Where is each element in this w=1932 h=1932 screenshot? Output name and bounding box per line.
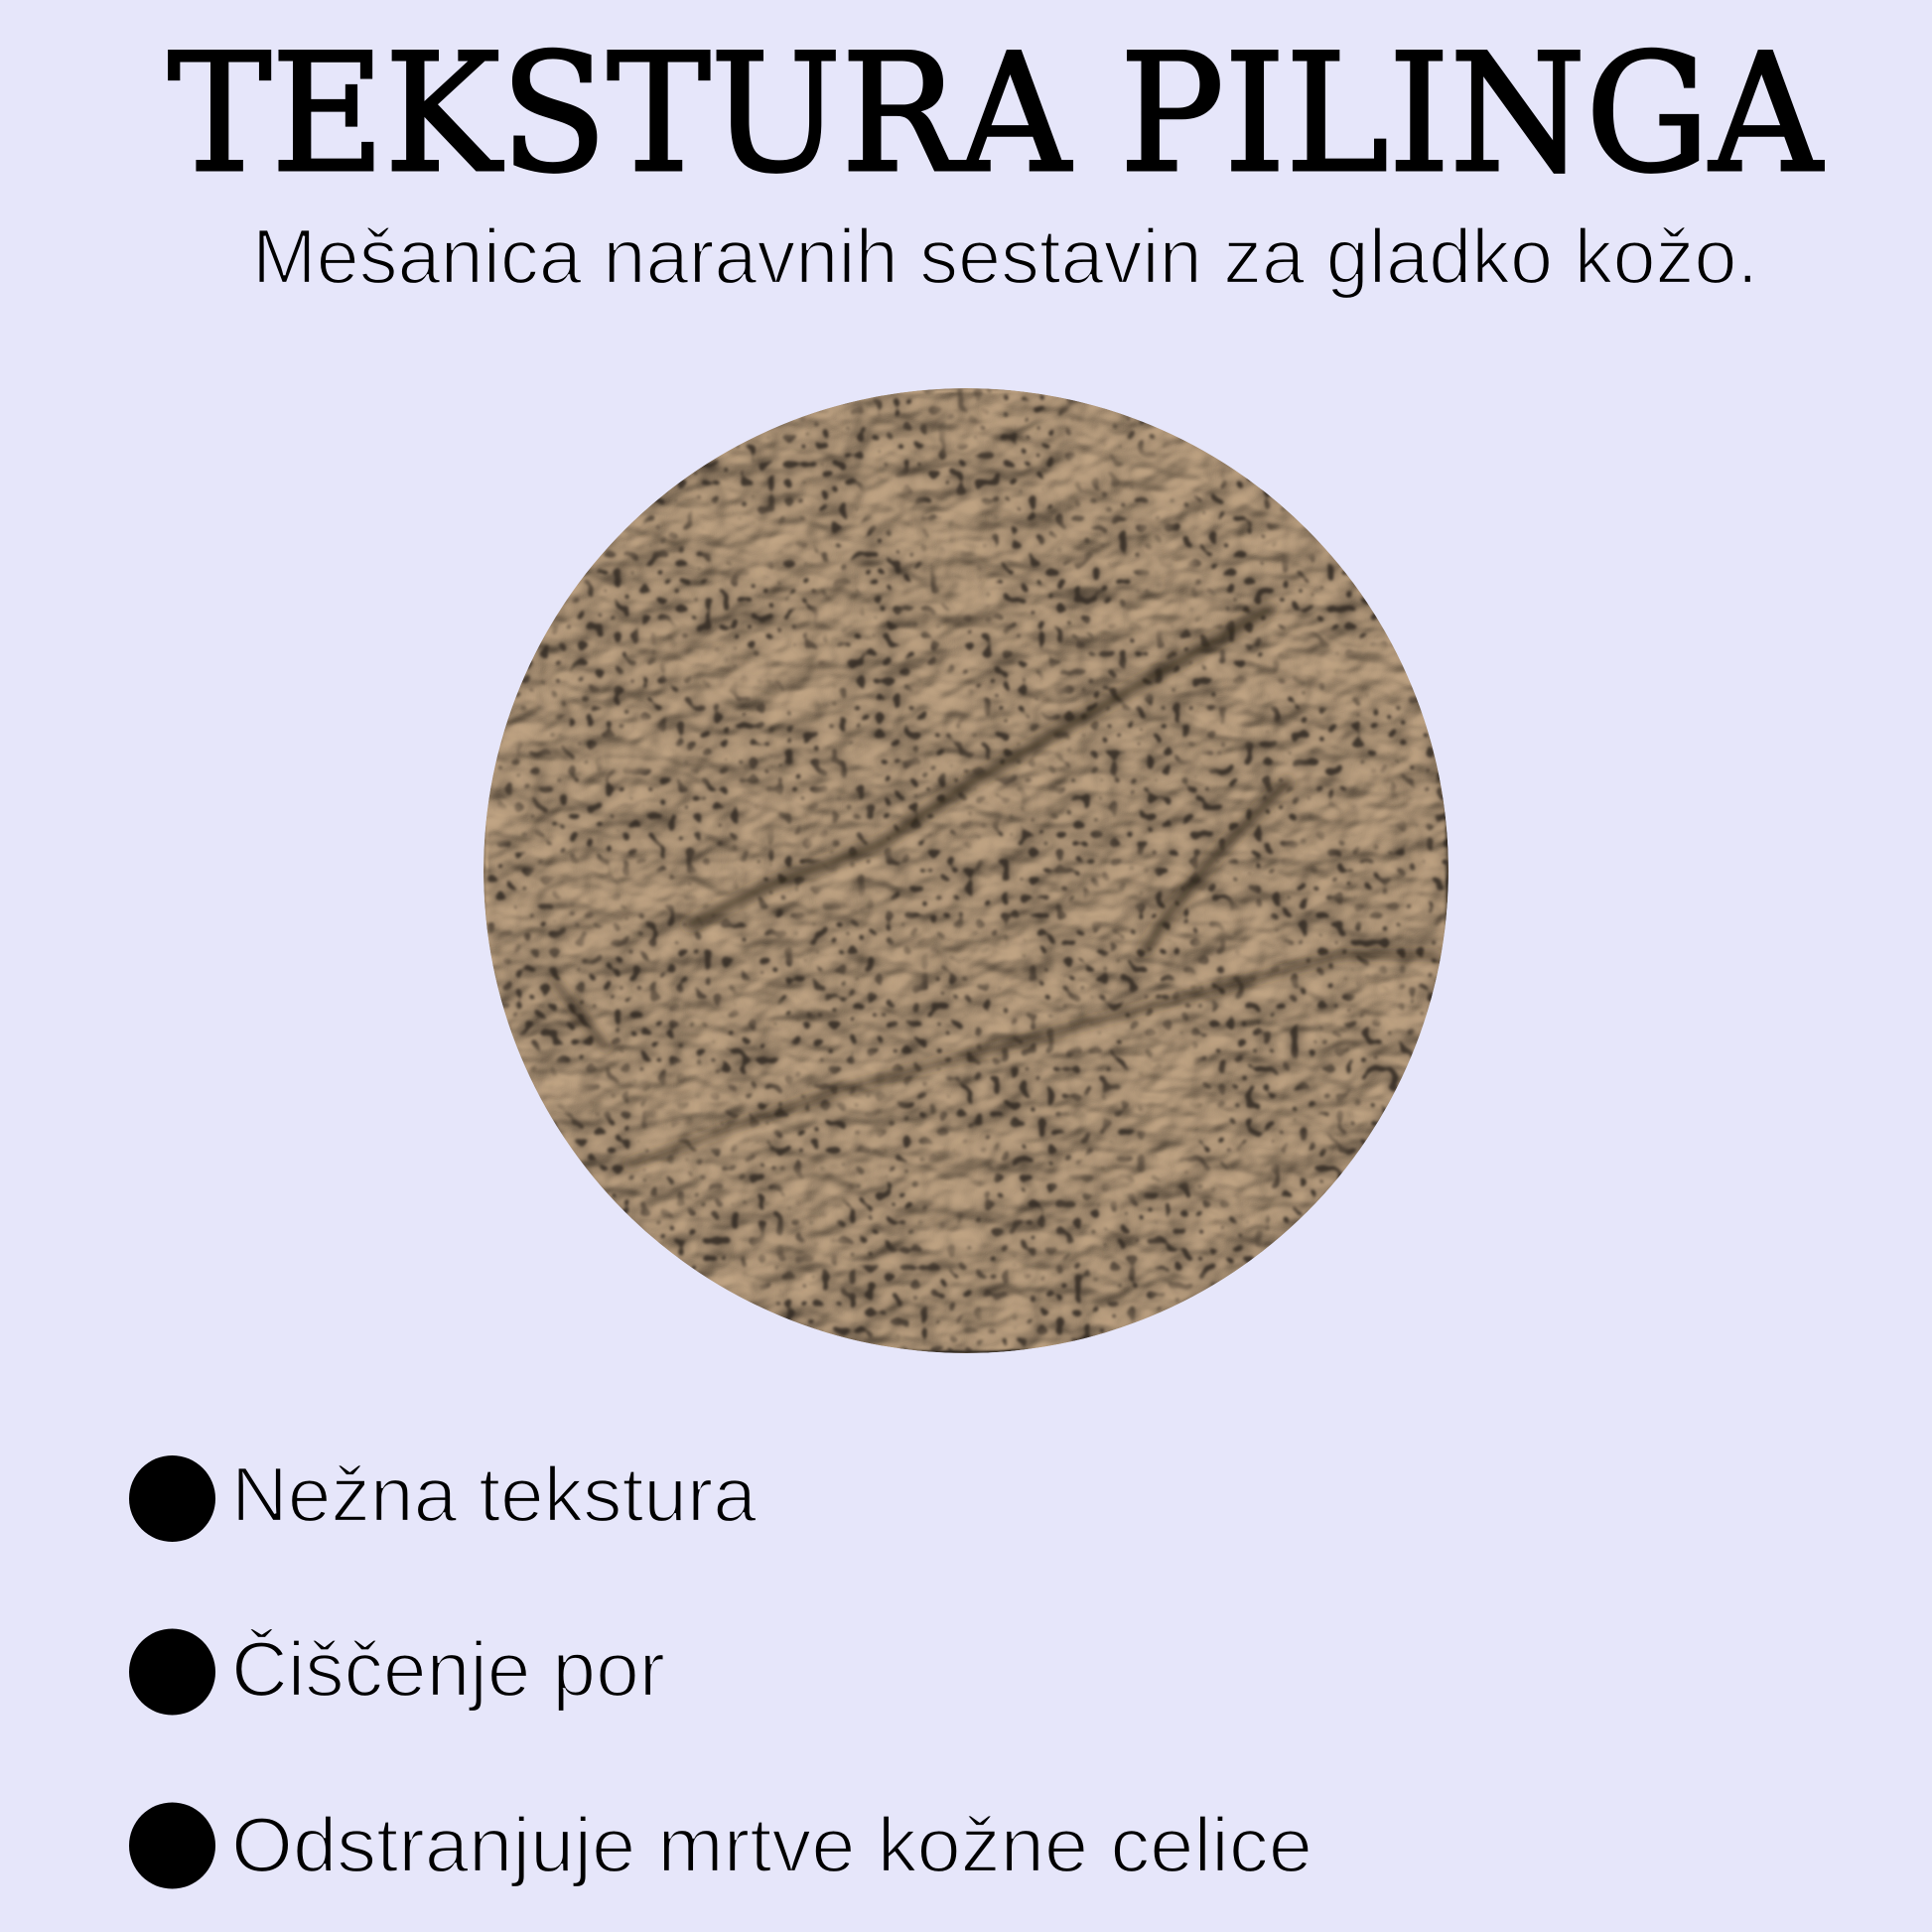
bullet text: Čiščenje por bbox=[231, 1625, 665, 1713]
scrub texture circle bbox=[483, 388, 1449, 1353]
bullet: Nežna tekstura bbox=[129, 1450, 758, 1542]
bullet dot bbox=[129, 1628, 215, 1716]
bullet text: Nežna tekstura bbox=[231, 1450, 758, 1538]
bullet: Odstranjuje mrtve kožne celice bbox=[129, 1801, 1312, 1888]
bullet dot bbox=[129, 1455, 215, 1542]
title: TEKSTURA PILINGA bbox=[168, 19, 1824, 208]
bullet: Čiščenje por bbox=[129, 1625, 665, 1716]
light ridges beside furrows bbox=[628, 625, 1436, 1179]
bullet dot bbox=[129, 1803, 215, 1888]
subtitle: Mešanica naravnih sestavin za gladko kožo. bbox=[252, 212, 1758, 300]
bullet text: Odstranjuje mrtve kožne celice bbox=[231, 1801, 1312, 1888]
dark furrows in the scrub bbox=[556, 610, 1436, 1165]
